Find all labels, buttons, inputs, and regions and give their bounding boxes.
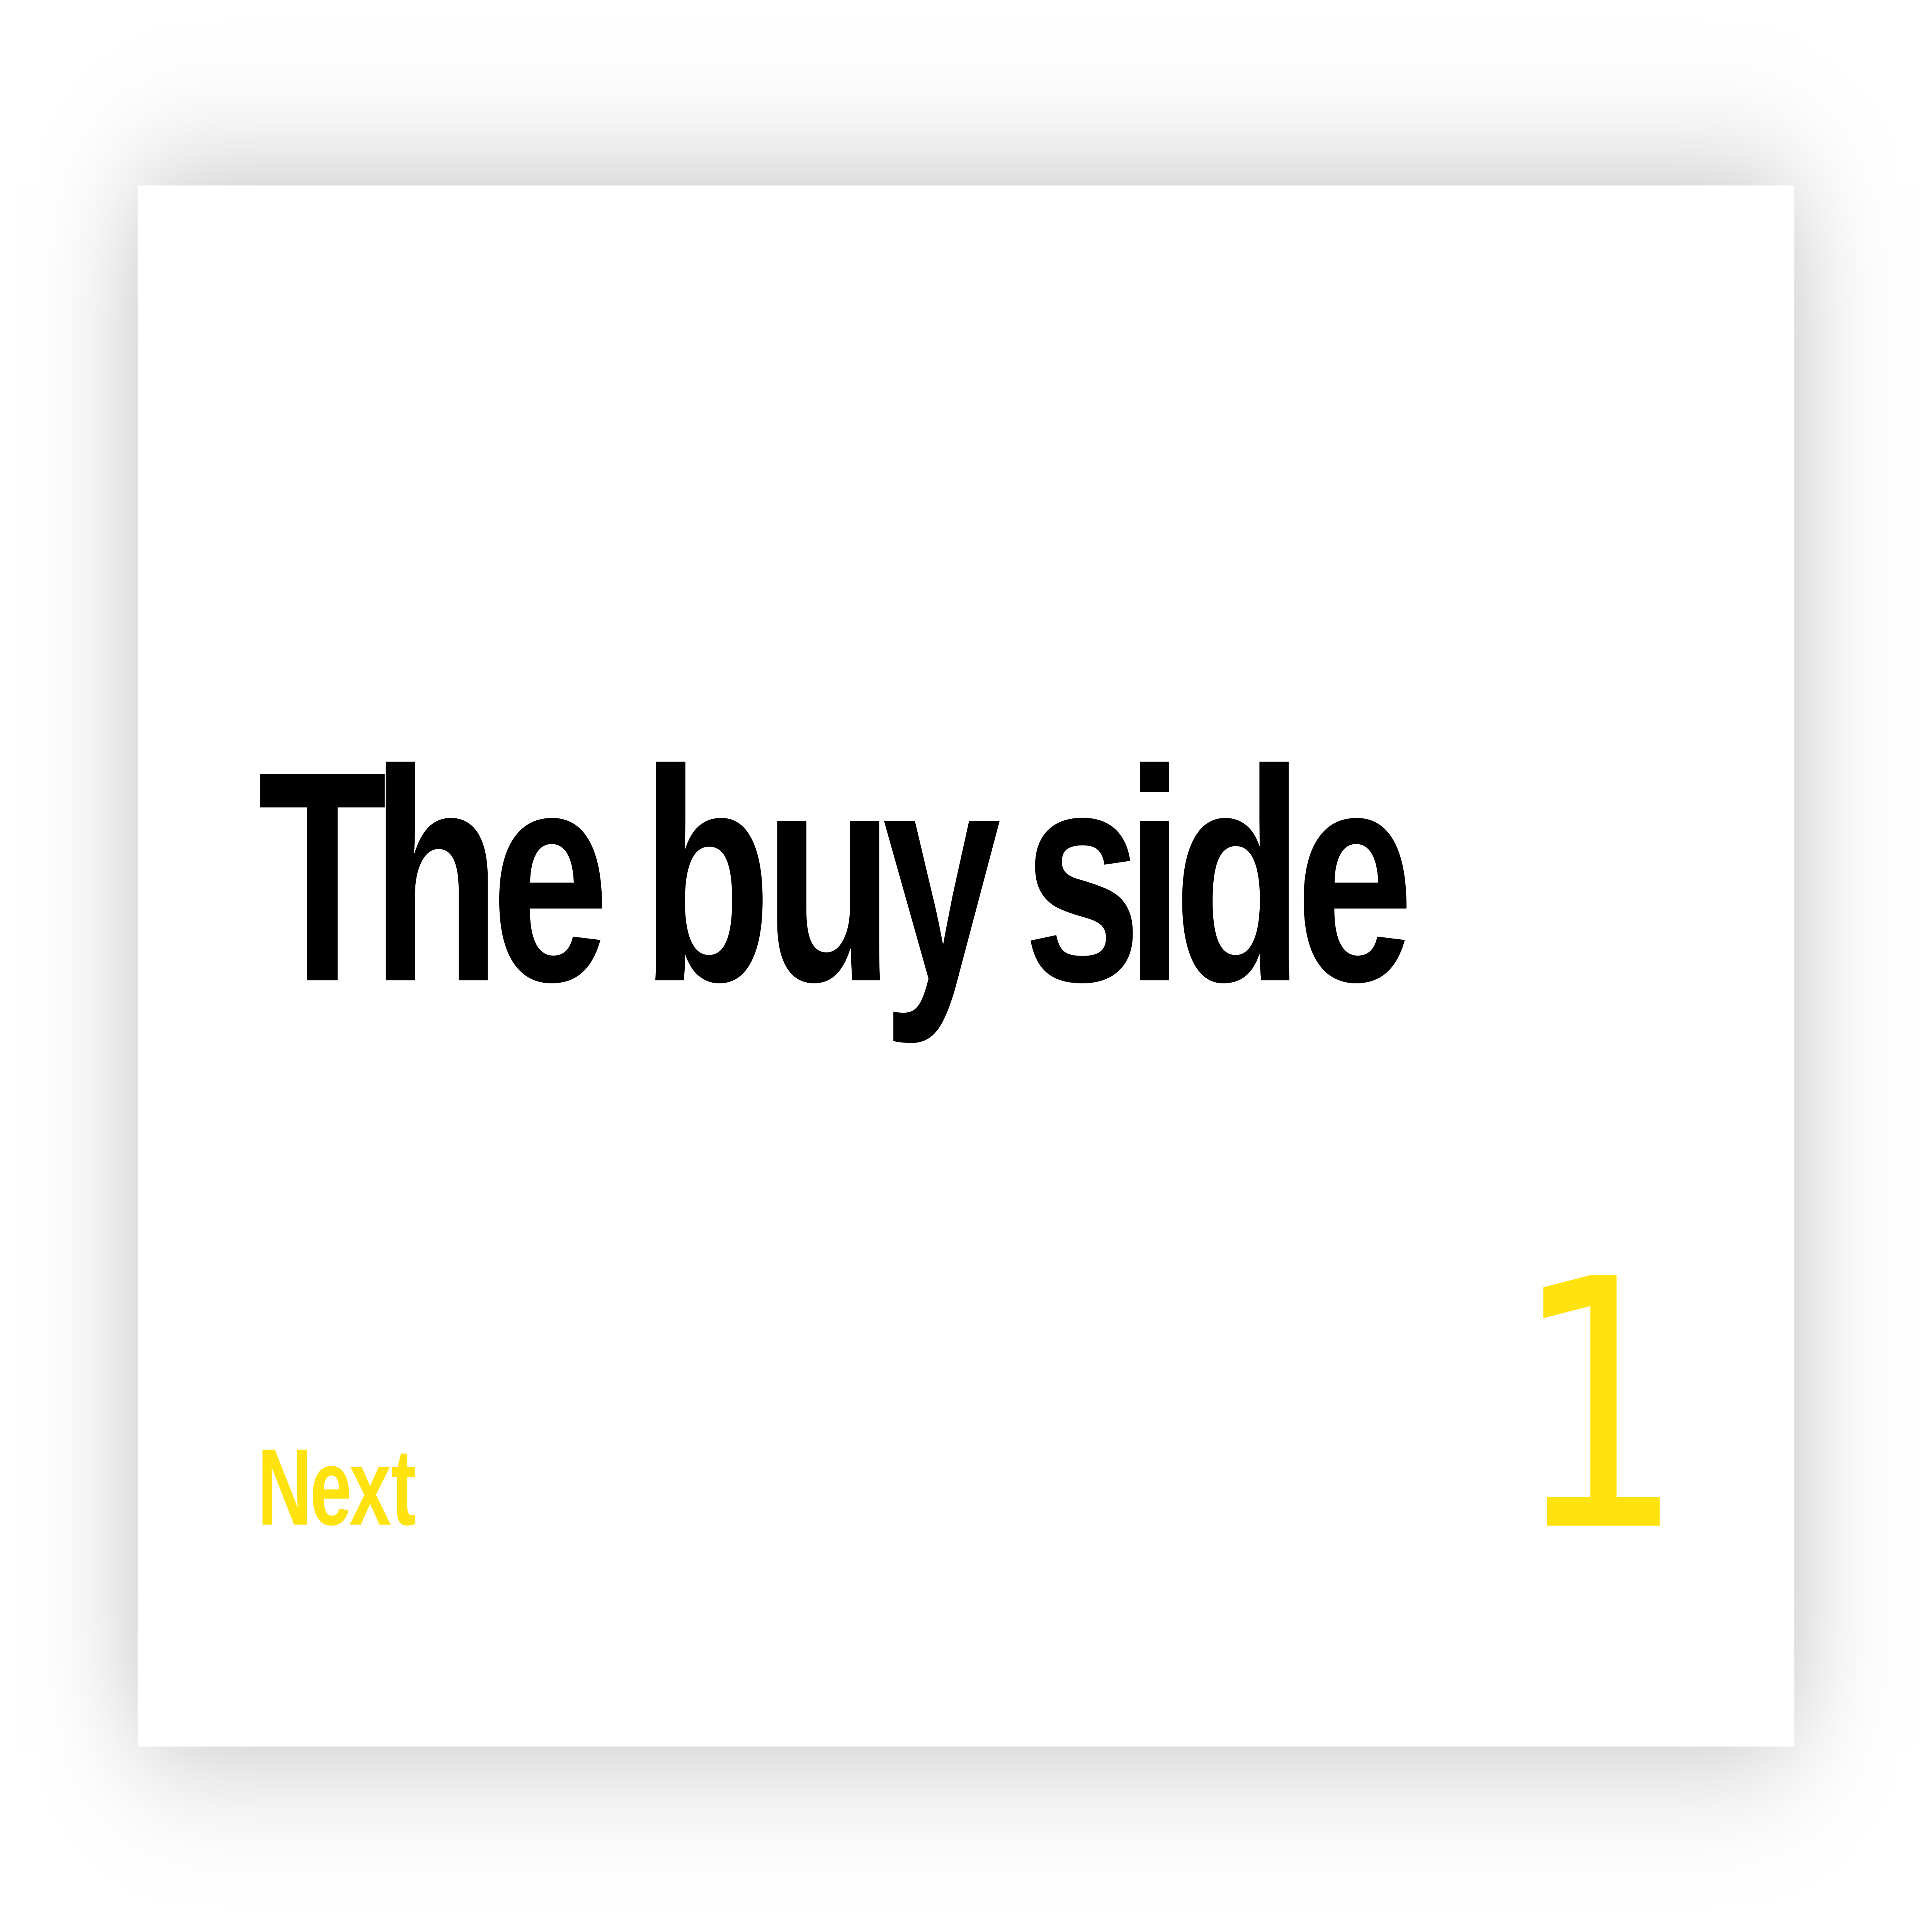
panel: white slide card — [138, 185, 1794, 1747]
title: The buy side — [258, 707, 1414, 1046]
next label: Next — [257, 1427, 416, 1548]
page number: 1 — [1514, 1207, 1684, 1607]
